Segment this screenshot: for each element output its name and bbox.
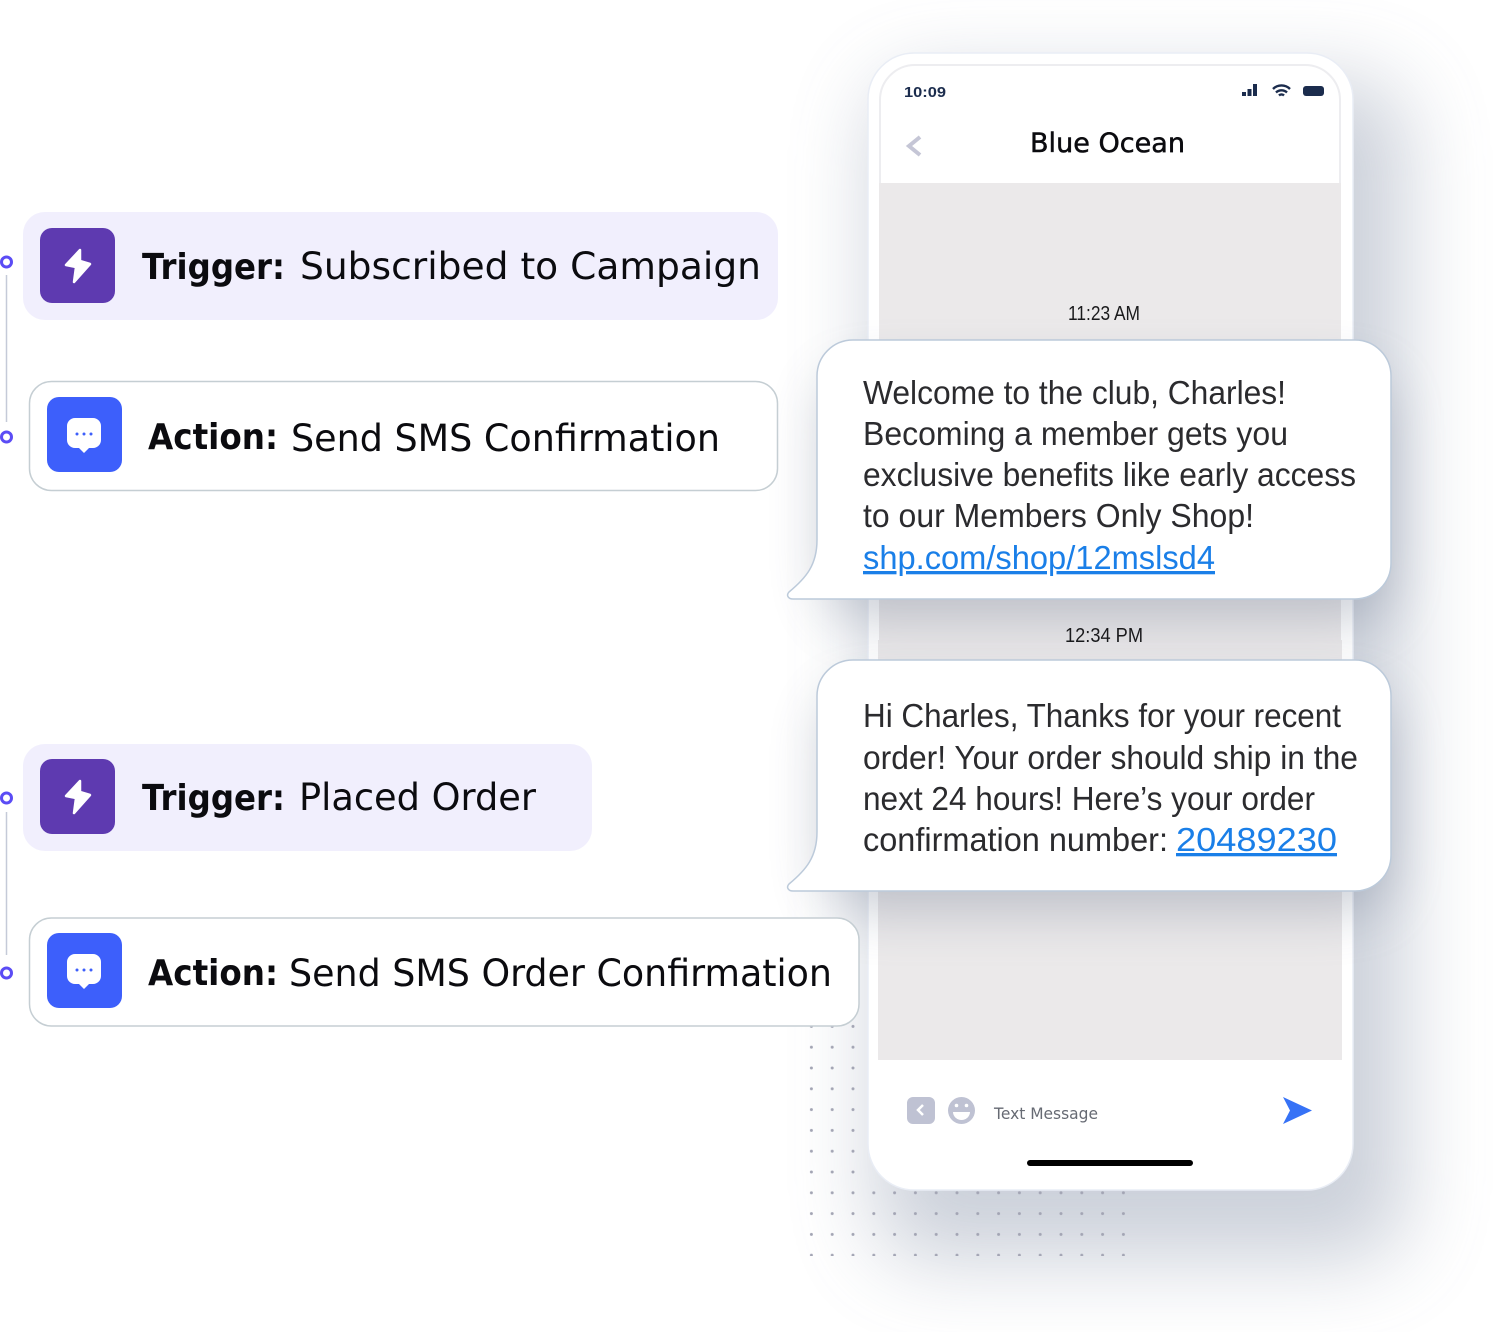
bubble shape [788, 340, 1391, 599]
icon: chat bubble [47, 397, 122, 472]
action label: Action: [148, 953, 278, 994]
bubble text [863, 374, 1356, 576]
bubble text: next 24 hours! Here’s your order [863, 780, 1315, 817]
bubble shape [788, 660, 1391, 891]
status time: 10:09 [904, 84, 946, 101]
icon: emoji [948, 1097, 975, 1124]
bubble text: Welcome to the club, Charles! [863, 374, 1286, 411]
message shadow one [825, 375, 1390, 620]
bubble text: confirmation number: [863, 821, 1168, 858]
flow connector one [2, 257, 12, 442]
icon: wifi [1273, 85, 1290, 96]
trigger label: Trigger: [142, 247, 285, 288]
icon: attachment button [907, 1097, 935, 1124]
phone drop shadow [875, 80, 1405, 1260]
icon: lightning bolt [40, 228, 115, 303]
action description: Send SMS Confirmation [291, 417, 720, 460]
trigger card: placed order [23, 744, 592, 851]
icon: battery [1303, 86, 1324, 96]
trigger description: Subscribed to Campaign [300, 245, 761, 288]
timestamp one: 11:23 AM [1068, 303, 1140, 325]
icon: lightning bolt [40, 759, 115, 834]
flow connector two [2, 793, 12, 978]
action card: send sms order confirmation [30, 918, 859, 1026]
bubble text: to our Members Only Shop! [863, 497, 1254, 534]
home indicator [1027, 1160, 1193, 1166]
phone inner screen outline [880, 65, 1340, 183]
message bubble one [788, 340, 1391, 599]
input placeholder: Text Message [993, 1104, 1098, 1123]
icon: back chevron [909, 137, 920, 155]
bubble text: shp.com/shop/12mslsd4 [863, 539, 1215, 576]
message bubble two [788, 660, 1391, 891]
action card: send sms confirmation [30, 382, 778, 490]
bubble text: order! Your order should ship in the [863, 739, 1358, 776]
action description: Send SMS Order Confirmation [289, 952, 832, 995]
message shadow two [825, 695, 1390, 910]
timestamp two: 12:34 PM [1065, 625, 1143, 647]
phone body [868, 53, 1353, 1190]
action label: Action: [148, 417, 278, 458]
icon: chat bubble [47, 933, 122, 1008]
icon: send arrow [1283, 1097, 1312, 1124]
bubble text: 20489230 [1176, 821, 1337, 858]
trigger label: Trigger: [142, 778, 285, 819]
contact name: Blue Ocean [1030, 128, 1185, 159]
bubble text: exclusive benefits like early access [863, 456, 1356, 493]
bubble text: Hi Charles, Thanks for your recent [863, 697, 1341, 734]
icon: signal [1242, 84, 1257, 96]
dot pattern [801, 1016, 1136, 1256]
bubble text [863, 697, 1358, 858]
bubble text: Becoming a member gets you [863, 415, 1288, 452]
trigger card: subscribed to campaign [23, 212, 778, 320]
trigger description: Placed Order [299, 776, 537, 819]
message area [878, 183, 1342, 1060]
phone mockup [868, 53, 1353, 1190]
